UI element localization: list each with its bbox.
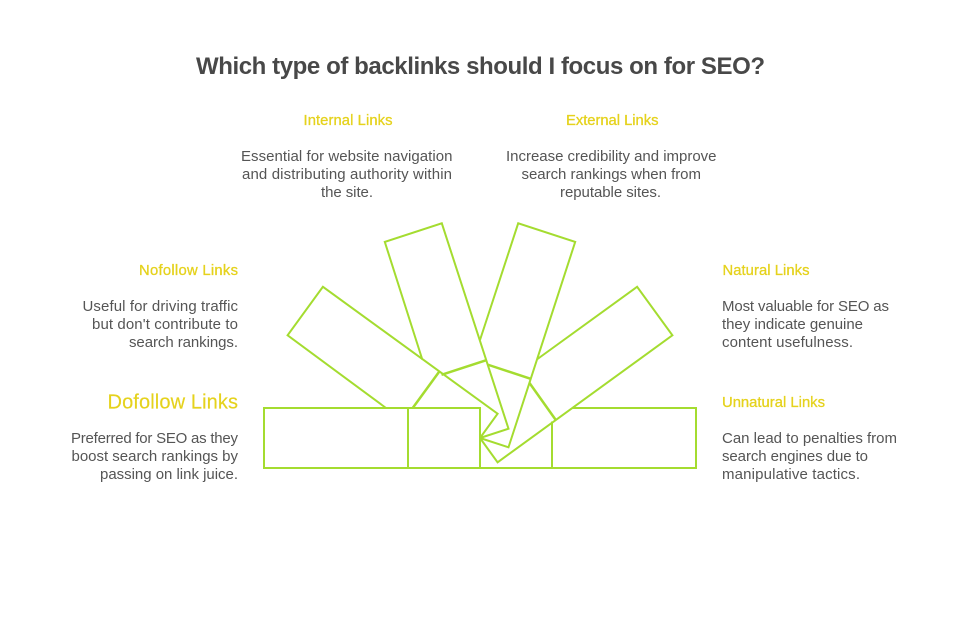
- label: natural links: they indicate genuine: [722, 316, 863, 333]
- label: dofollow links: Preferred for SEO as they: [71, 430, 238, 447]
- label: external links: reputable sites.: [560, 184, 661, 201]
- label: dofollow links: passing on link juice.: [100, 466, 238, 483]
- label: nofollow links: Useful for driving traffic: [82, 298, 238, 315]
- title: Which type of backlinks should I focus on for SEO?: [196, 53, 765, 80]
- label: external links: search rankings when from: [522, 166, 701, 183]
- label: nofollow links: [82, 263, 238, 351]
- label: unnatural links: search engines due to: [722, 448, 868, 465]
- label: dofollow links: boost search rankings by: [72, 448, 238, 465]
- label: dofollow links: Dofollow Links: [108, 392, 238, 414]
- fan diagram: [264, 223, 696, 468]
- segment: unnatural links: [480, 408, 696, 468]
- label: external links: [506, 113, 716, 201]
- label: unnatural links: Unnatural Links: [722, 395, 825, 411]
- label: unnatural links: manipulative tactics.: [722, 466, 860, 483]
- segment: external links: [480, 223, 575, 447]
- label: external links: External Links: [566, 113, 658, 129]
- label: internal links: the site.: [321, 184, 373, 201]
- label: nofollow links: but don't contribute to: [92, 316, 238, 333]
- label: internal links: Essential for website navigation: [241, 148, 452, 165]
- label: unnatural links: Can lead to penalties from: [722, 430, 897, 447]
- segment: internal links: [385, 223, 508, 438]
- label: internal links: [241, 113, 452, 201]
- label: unnatural links: [722, 395, 897, 483]
- segment: dofollow links: [264, 408, 480, 468]
- segment: nofollow links: [288, 287, 498, 438]
- label: nofollow links: Nofollow Links: [139, 263, 238, 279]
- label: internal links: and distributing authority within: [242, 166, 452, 183]
- label: dofollow links: [71, 392, 238, 483]
- label: natural links: [722, 263, 889, 351]
- label: natural links: Most valuable for SEO as: [722, 298, 889, 315]
- label: internal links: Internal Links: [304, 113, 392, 129]
- label: natural links: Natural Links: [722, 263, 810, 279]
- label: external links: Increase credibility and improve: [506, 148, 716, 165]
- segment: natural links: [480, 287, 672, 462]
- label: nofollow links: search rankings.: [129, 334, 238, 351]
- label: natural links: content usefulness.: [722, 334, 853, 351]
